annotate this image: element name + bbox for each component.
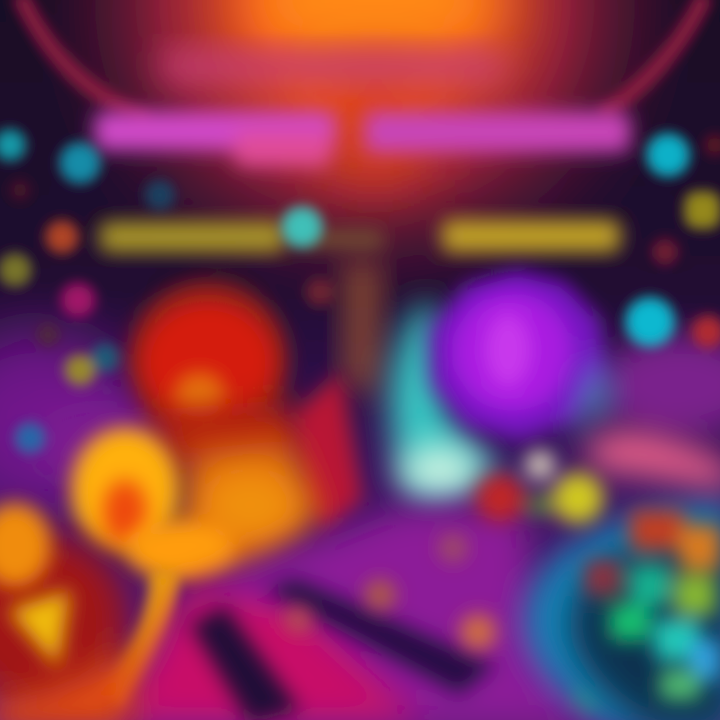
floor dots bbox=[284, 534, 608, 708]
background glow: orange sun bbox=[25, 0, 705, 320]
pale glow below the crescent bbox=[400, 445, 480, 495]
centre light column bbox=[345, 260, 379, 390]
lower middle magenta haze bbox=[30, 400, 170, 480]
figure: red astronaut helmet bbox=[128, 280, 288, 440]
heading line: pink title bbox=[95, 112, 630, 166]
dark stripes on floor bbox=[190, 578, 495, 720]
dark swirl core bbox=[570, 530, 720, 720]
right side purple haze bbox=[600, 335, 720, 435]
figure: red suit arm bbox=[295, 372, 362, 530]
figure: yellow body bbox=[71, 428, 320, 700]
purple planet floor bbox=[130, 510, 590, 720]
arc ring at the top bbox=[20, 0, 705, 120]
cluster of small spheres bbox=[476, 451, 603, 523]
lower left orange bowl bbox=[0, 503, 130, 720]
confetti dots bbox=[0, 130, 720, 453]
left side purple haze bbox=[0, 330, 140, 510]
lower right blue swirl bbox=[525, 500, 720, 720]
heading line: faint top title bbox=[160, 50, 505, 82]
pink and orange ribbon bbox=[590, 432, 720, 490]
teal crescent behind the purple sphere bbox=[390, 305, 505, 505]
heading line: yellow subtitle bbox=[100, 220, 620, 252]
magenta floor area bbox=[120, 590, 420, 720]
purple sphere bbox=[430, 270, 612, 440]
colourful cubes bbox=[585, 510, 720, 700]
figure: red suit body bbox=[150, 400, 310, 470]
